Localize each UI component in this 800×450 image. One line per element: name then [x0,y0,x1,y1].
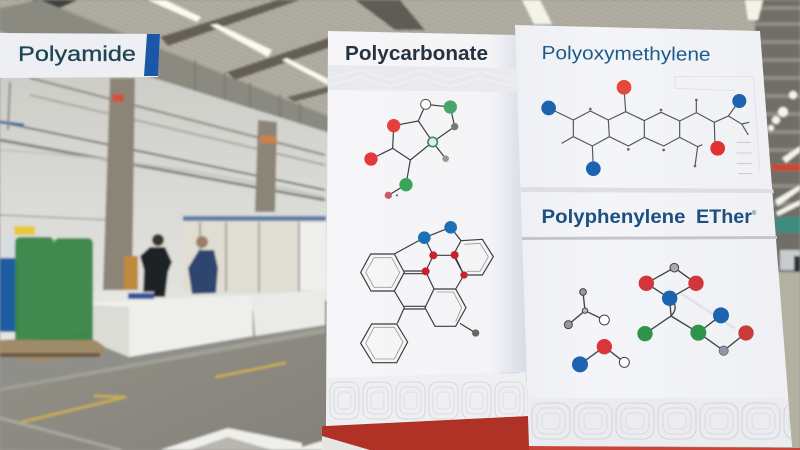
right background [522,0,800,450]
divider strip [521,187,777,240]
display tables [88,289,325,357]
pattern band [530,398,792,447]
heading: Polyphenylene Ether: ETher [696,207,753,228]
panel: polyoxymethylene and polyphenylene ether [515,25,792,447]
panel: polyamide sign [0,33,160,78]
wave band [328,65,517,92]
heading: Polyphenylene Ether: ® [752,210,757,217]
panel: polycarbonate [326,31,528,426]
people [124,234,218,297]
pillars [103,78,135,290]
heading: Polyphenylene Ether: Polyphenylene [542,207,686,228]
floor lines [0,363,285,450]
heading: Polyamide: Polyamide [18,43,136,66]
yellow wall sign [14,226,35,235]
molecule diagram one [364,99,458,199]
molecule diagram three [541,77,760,176]
ceiling [0,0,800,130]
pallet [0,340,104,362]
floor [0,300,330,450]
red table [322,414,800,450]
white crates [160,428,340,450]
molecule diagrams four [564,263,754,372]
far cabinets [183,216,326,292]
heading: Polyphenylene Ether [542,207,757,228]
upper wall band [0,0,330,135]
pattern band [327,372,528,425]
molecule diagram two [361,221,493,363]
barrels [0,237,93,347]
heading: Polyoxymethylene: Polyoxymethylene [541,43,711,66]
heading: Polycarbonate: Polycarbonate [345,43,488,65]
wall rails [0,78,325,220]
